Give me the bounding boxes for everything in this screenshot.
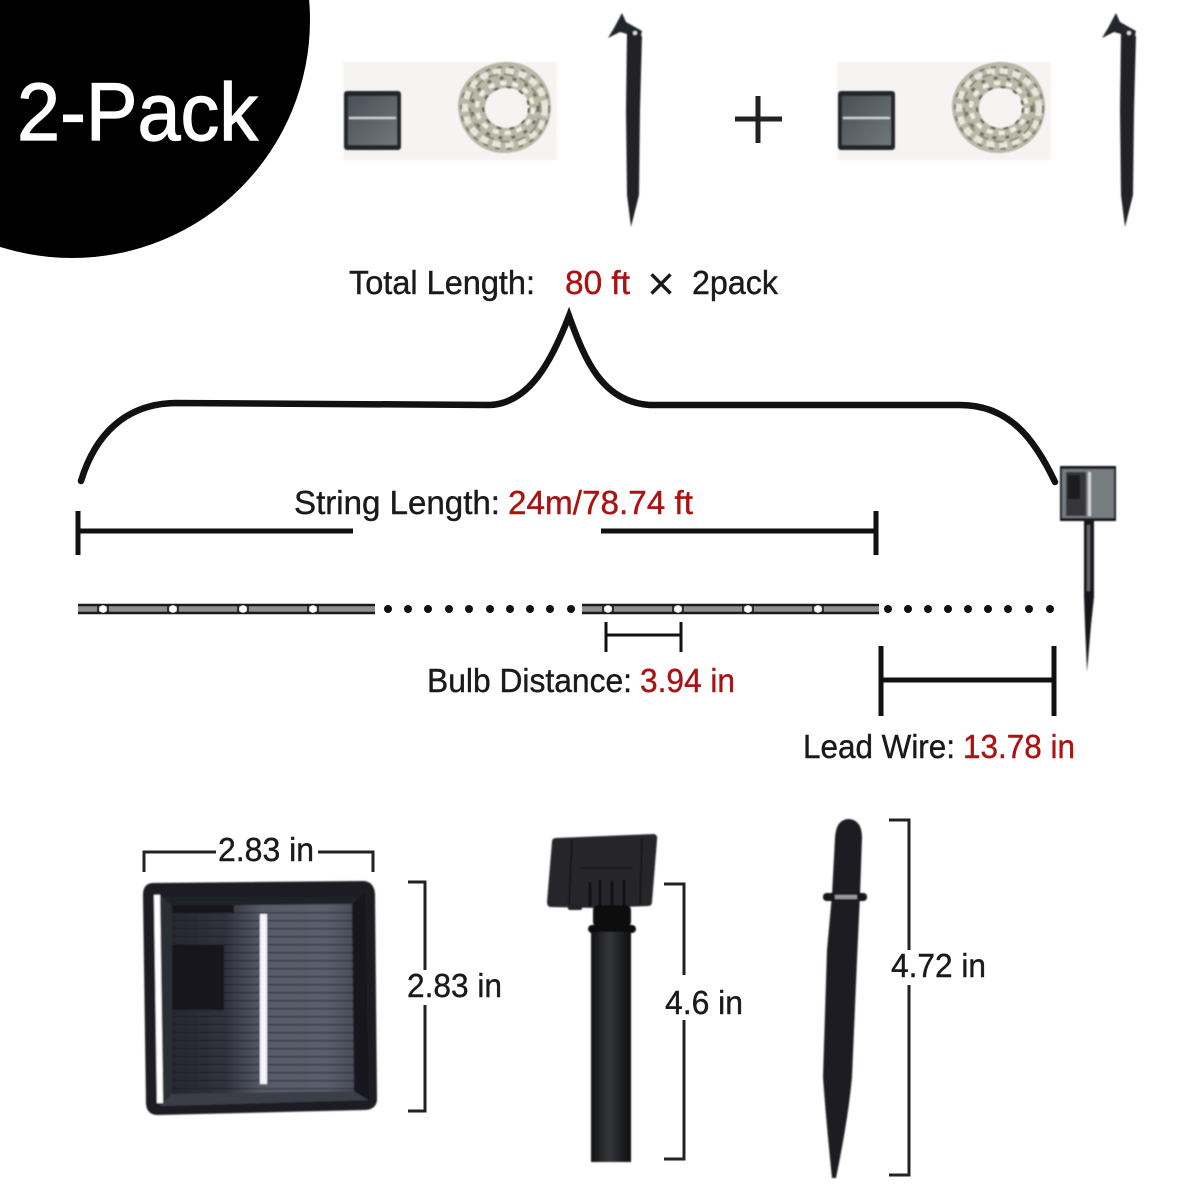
label: lead wire xyxy=(803,728,1075,765)
dimension bracket: bulb distance xyxy=(606,622,681,652)
icon: solar panel on stake xyxy=(1060,466,1116,672)
label: lead wire: 13.78 in xyxy=(963,728,1075,765)
dimension: panel height: 2.83 in xyxy=(407,967,502,1004)
icon: solar panel 1 xyxy=(344,91,401,150)
large solar panel xyxy=(143,881,377,1115)
label: total length: Total Length: xyxy=(349,264,535,301)
icon: solar panel 2 xyxy=(838,91,895,150)
icon: garden stake 1 xyxy=(608,13,642,227)
label: total length: × xyxy=(647,258,675,311)
label: bulb distance xyxy=(427,662,735,699)
icon: light coil 1 xyxy=(457,61,553,155)
badge: 2-Pack xyxy=(0,0,310,258)
light string diagram xyxy=(78,604,1054,614)
dotted gap 1 xyxy=(384,605,575,613)
label: bulb distance: 3.94 in xyxy=(640,662,735,699)
label: string length: String Length: xyxy=(294,484,500,521)
product set 2: panel, light coil and stake xyxy=(837,13,1136,227)
label: lead wire: Lead Wire: xyxy=(803,728,955,765)
curly brace: total length span xyxy=(81,316,1055,482)
dimension bracket: lead wire xyxy=(881,646,1054,716)
badge: 2-Pack: 2-Pack xyxy=(17,67,259,158)
label: total length xyxy=(349,258,778,311)
label: string length xyxy=(294,484,693,521)
dimension: panel height xyxy=(407,882,502,1111)
dimension: panel width: 2.83 in xyxy=(218,831,314,868)
dimension bracket: string length xyxy=(78,511,876,555)
dimension: mount height xyxy=(664,884,743,1159)
product set 1: panel, light coil and stake xyxy=(343,13,642,227)
icon: light coil 2 xyxy=(951,61,1047,155)
label: string length: 24m/78.74 ft xyxy=(508,484,693,521)
dimension: panel width xyxy=(144,831,373,872)
stake top with panel mount xyxy=(547,834,657,1162)
label: total length: 80 ft xyxy=(565,264,630,301)
label: bulb distance: Bulb Distance: xyxy=(427,662,632,699)
plus sign xyxy=(735,96,782,143)
dotted gap 2 xyxy=(884,605,1054,613)
icon: garden stake 2 xyxy=(1102,13,1136,227)
string segment 2 xyxy=(582,604,879,614)
dimension: spike height xyxy=(889,820,986,1175)
label: total length: 2pack xyxy=(692,264,778,301)
dimension: spike height: 4.72 in xyxy=(891,947,986,984)
dimension: mount height: 4.6 in xyxy=(665,984,743,1021)
ground spike xyxy=(823,819,867,1178)
string segment 1 xyxy=(78,604,375,614)
